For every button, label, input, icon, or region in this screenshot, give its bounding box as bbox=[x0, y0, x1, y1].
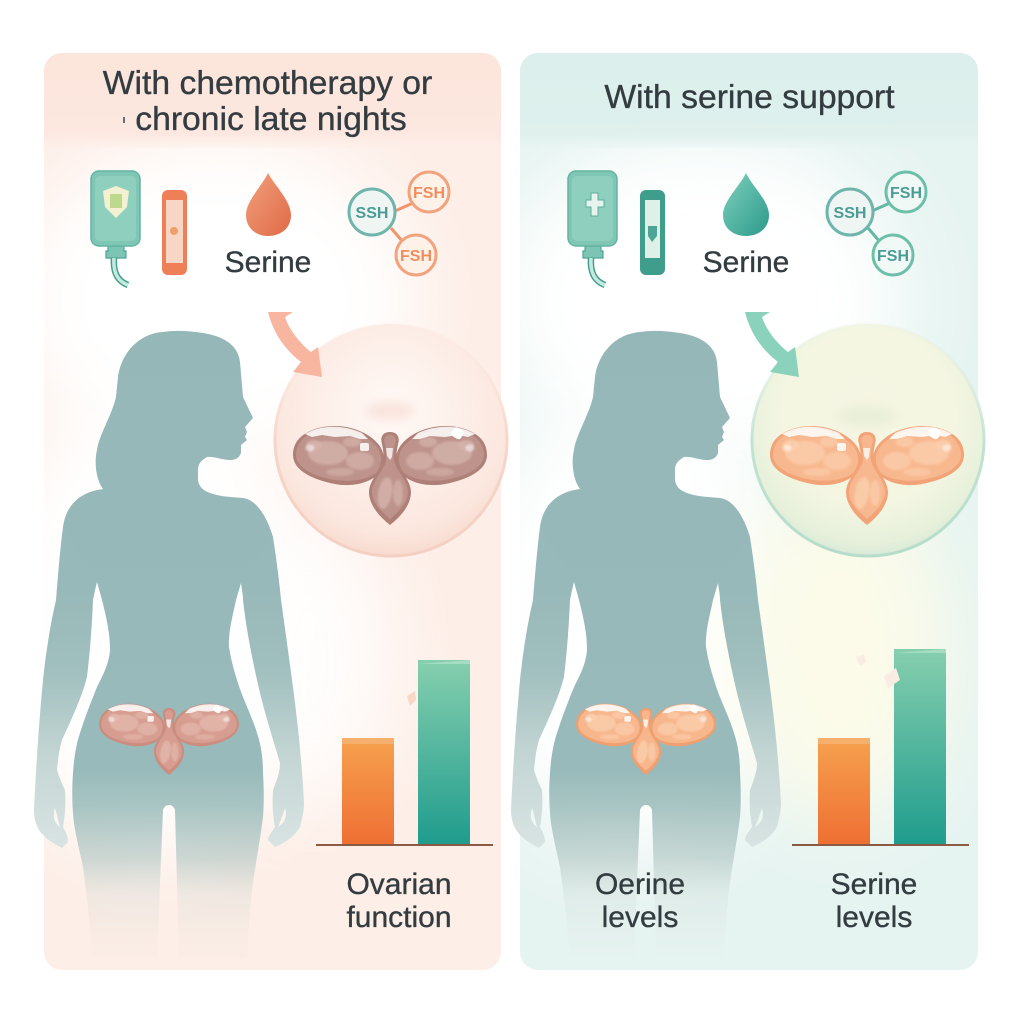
heading: left panel title bbox=[103, 64, 432, 138]
small ovary on body bbox=[99, 704, 239, 775]
label: ovarian function bbox=[346, 868, 452, 934]
callout: ovary close-up bbox=[752, 324, 984, 556]
label: serine levels: levels bbox=[836, 901, 912, 934]
icon: hormone network bbox=[349, 172, 449, 275]
icon: hormone network: FSH bbox=[400, 248, 432, 265]
callout: ovary close-up bbox=[275, 324, 507, 556]
icon: serine drop bbox=[723, 173, 769, 236]
silhouette: woman bbox=[34, 331, 304, 958]
silhouette: woman bbox=[511, 331, 781, 958]
label: oerine levels: Oerine bbox=[595, 868, 685, 901]
heading: right panel title: With serine support bbox=[604, 78, 895, 116]
icon: hormone network: FSH bbox=[877, 248, 909, 265]
label: oerine levels: levels bbox=[602, 901, 678, 934]
label: serine: Serine bbox=[225, 246, 311, 279]
label: ovarian function: function bbox=[346, 901, 452, 934]
panel: with serine support bbox=[465, 53, 984, 970]
icon: hormone network bbox=[827, 172, 926, 275]
label: oerine levels bbox=[595, 868, 685, 934]
icon: hormone network: FSH bbox=[890, 185, 922, 202]
icon: IV bag bbox=[91, 171, 140, 285]
arrow: to ovary close-up bbox=[745, 312, 799, 377]
icon: hormone network: SSH bbox=[356, 205, 388, 222]
small ovary on body bbox=[576, 704, 716, 775]
panel: with chemotherapy or chronic late nights bbox=[0, 53, 507, 970]
icon: IV bag bbox=[568, 171, 617, 285]
heading: left panel title: With chemotherapy or bbox=[103, 64, 432, 102]
heading: left panel title: chronic late nights bbox=[135, 100, 407, 138]
arrow: to ovary close-up bbox=[268, 312, 322, 377]
icon: hormone network: SSH bbox=[834, 205, 866, 222]
icon: vial bbox=[162, 190, 187, 275]
label: ovarian function: Ovarian bbox=[346, 868, 452, 901]
label: serine levels bbox=[831, 868, 917, 934]
icon: vial bbox=[640, 190, 665, 275]
label: serine: Serine bbox=[703, 246, 789, 279]
bar chart: ovarian function bbox=[316, 660, 493, 846]
label: serine levels: Serine bbox=[831, 868, 917, 901]
icon: serine drop bbox=[246, 173, 291, 236]
icon: hormone network: FSH bbox=[413, 185, 445, 202]
bar chart: serine levels bbox=[792, 649, 969, 846]
